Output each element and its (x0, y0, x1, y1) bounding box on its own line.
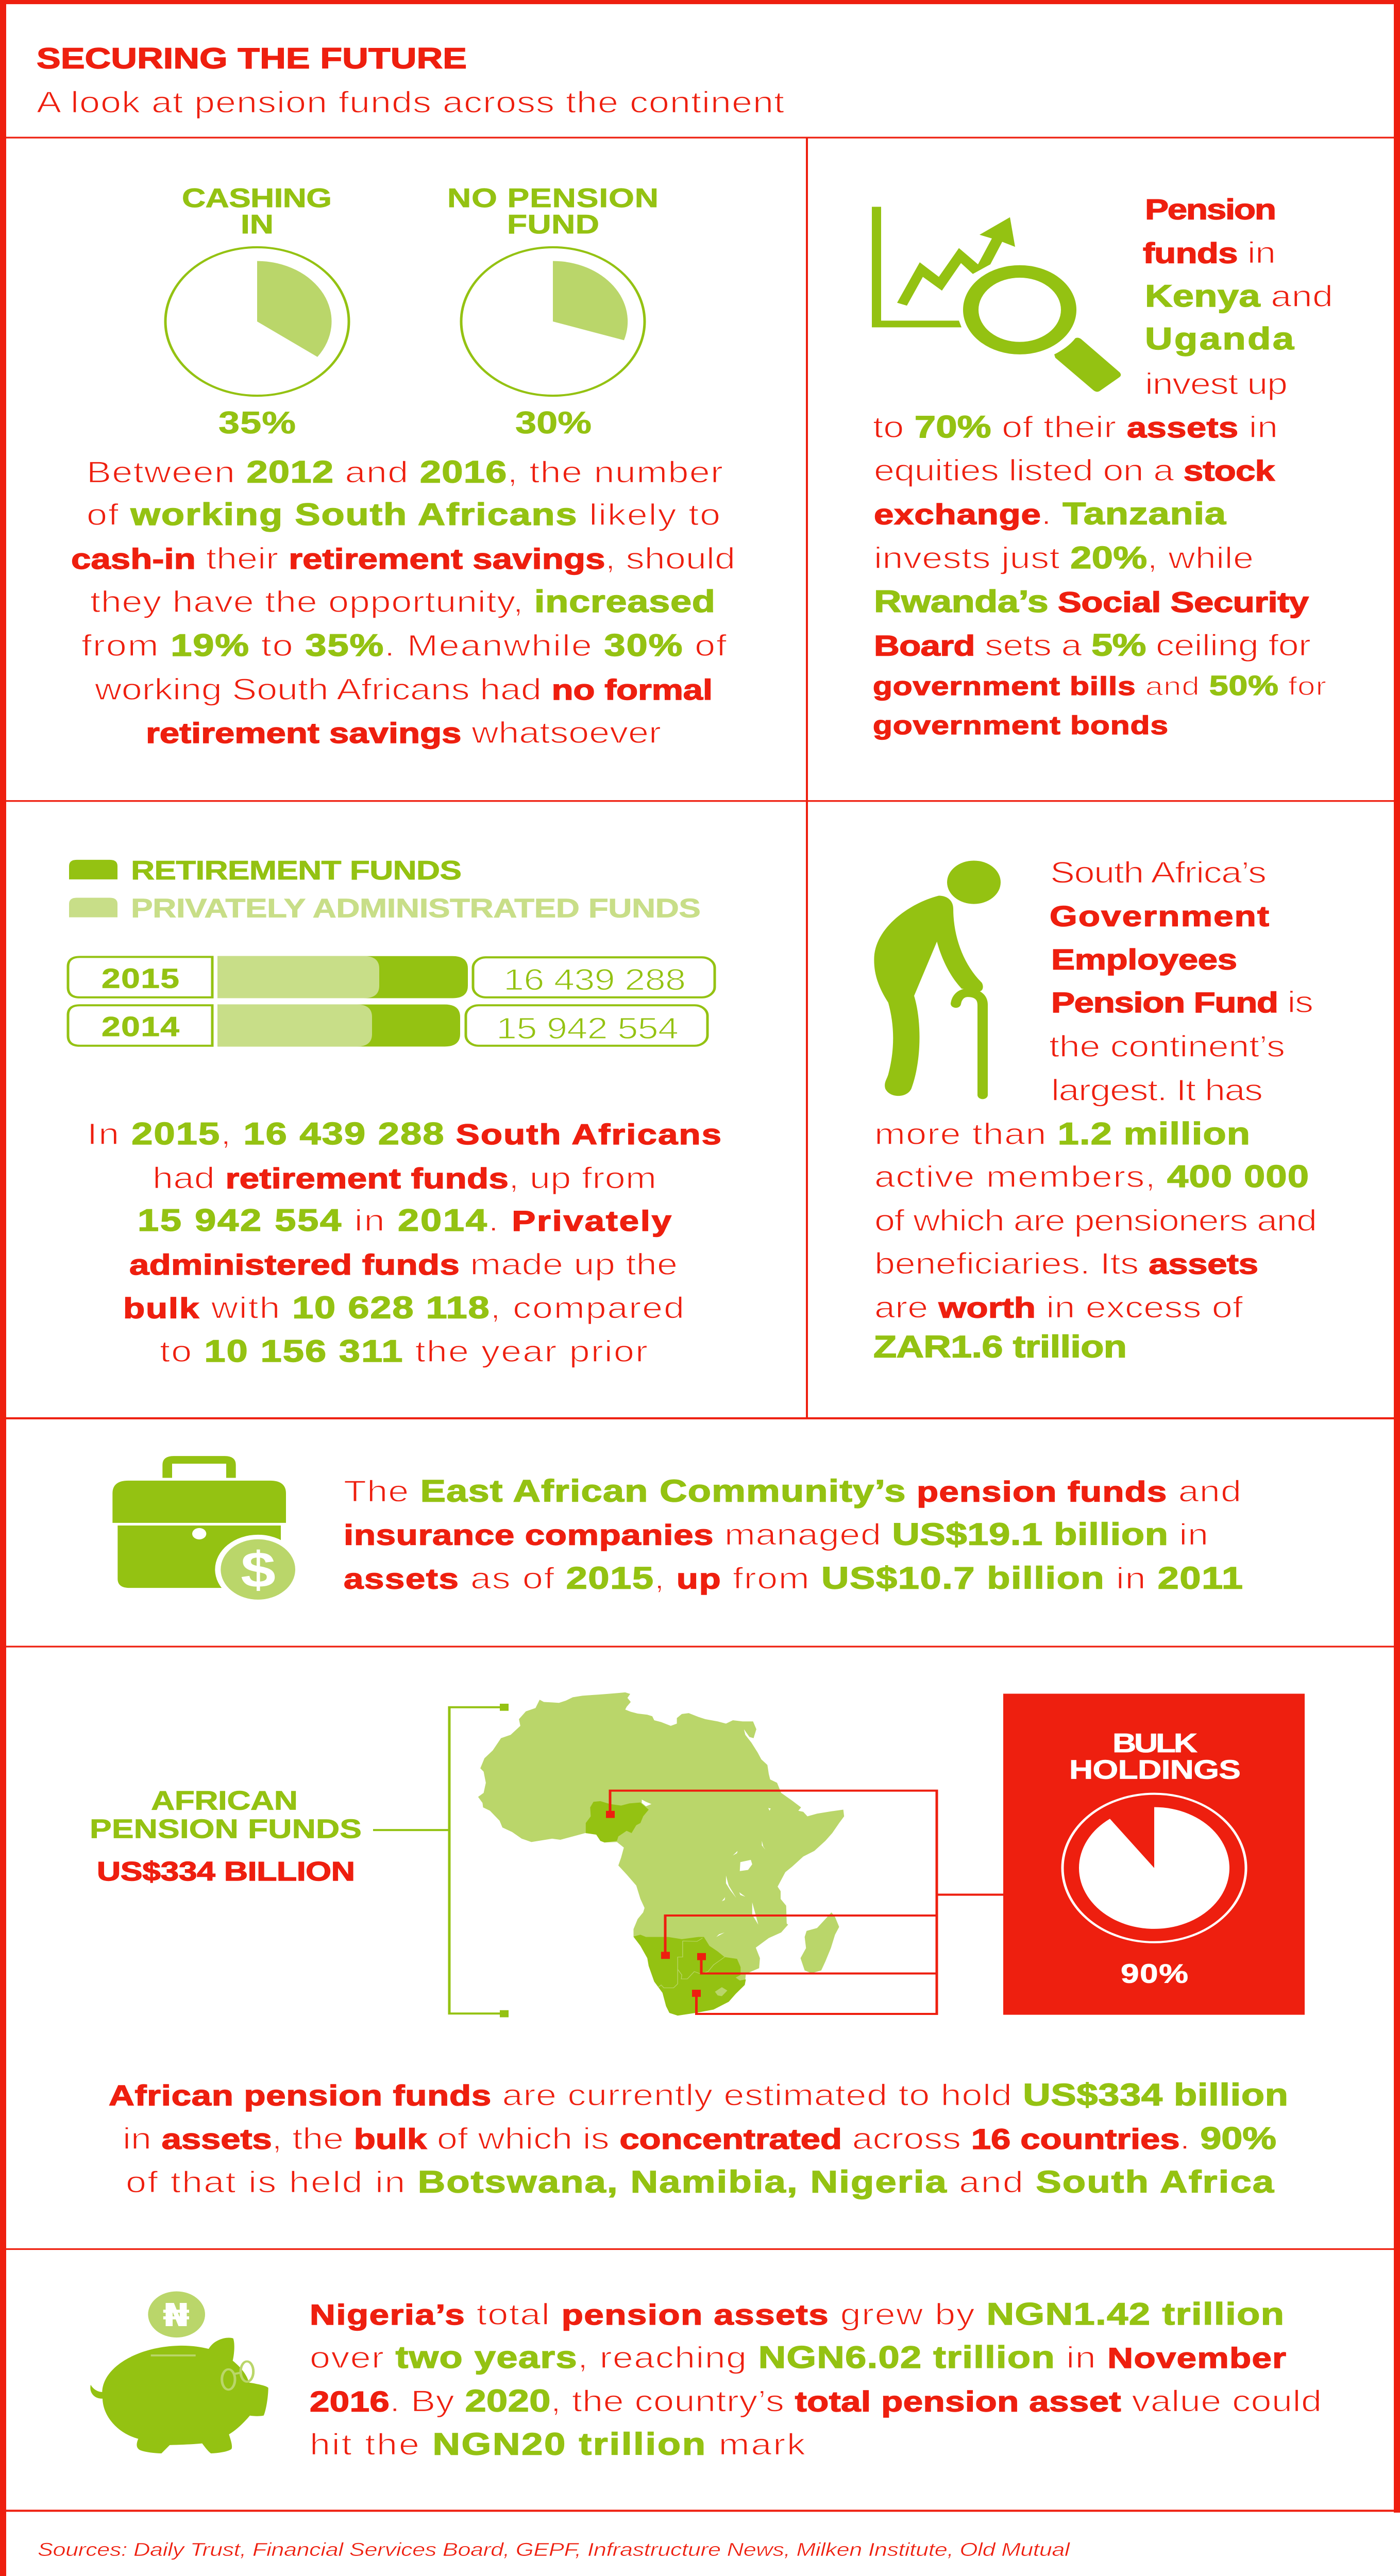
text block: retirement funds figures: bulk with 10 628 118, compared (123, 1291, 684, 1325)
bar: 2015: 2015 (102, 963, 179, 994)
text block: Nigeria: Nigeria’s total pension assets grew by NGN1.42 trillion (310, 2297, 1284, 2331)
pie chart: cashing in 35%: CASHING (182, 183, 332, 213)
text block: GEPF: beneficiaries. Its assets (874, 1247, 1258, 1280)
text block: GEPF: Employees (1051, 944, 1237, 976)
icon: elderly person with cane (874, 860, 1001, 1096)
text block: GEPF (873, 856, 1317, 1364)
legend: RETIREMENT FUNDS (131, 856, 462, 885)
bar: 2014: 2014 (102, 1011, 180, 1042)
text block: GEPF: largest. It has (1051, 1073, 1263, 1107)
text block: Kenya Uganda Tanzania Rwanda: Board sets a 5% ceiling for (874, 628, 1311, 663)
text block: Kenya Uganda Tanzania Rwanda: government bonds (873, 711, 1168, 740)
text block: Kenya Uganda Tanzania Rwanda: equities listed on a stock (874, 454, 1275, 487)
text block: GEPF: of which are pensioners and (874, 1204, 1317, 1238)
text block: Kenya Uganda Tanzania Rwanda (873, 194, 1333, 740)
text block: African pension funds: African pension funds are currently estimated to hold US$334 billion (109, 2078, 1288, 2112)
pie chart: cashing in 35%: IN (241, 210, 274, 240)
icon: chart under magnifying glass (872, 207, 1121, 392)
text block: African pension funds (109, 2078, 1288, 2199)
text block: East African Community (344, 1474, 1243, 1596)
text block: Kenya Uganda Tanzania Rwanda: exchange. Tanzania (874, 497, 1226, 531)
pie chart: cashing in 35% (165, 183, 349, 440)
bar: 2015 (68, 956, 715, 998)
text block: South African retirement savings: retirement savings whatsoever (146, 716, 661, 750)
text block: Kenya Uganda Tanzania Rwanda: to 70% of their assets in (873, 410, 1278, 444)
text block: retirement funds figures: In 2015, 16 439 288 South Africans (87, 1116, 721, 1151)
text block: Nigeria (310, 2297, 1322, 2462)
legend: PRIVATELY ADMINISTRATED FUNDS (131, 893, 701, 923)
icon: briefcase with dollar coin (112, 1456, 301, 1604)
icon: briefcase with dollar coin: $ (241, 1541, 276, 1598)
panel: Government Employees Pension Fund (808, 802, 1394, 1417)
pie chart: no pension fund 30%: 30% (515, 406, 592, 440)
text block: South African retirement savings: of working South Africans likely to (87, 498, 720, 532)
text block: Kenya Uganda Tanzania Rwanda: Rwanda’s Social Security (874, 585, 1309, 619)
panel: retirement funds (6, 802, 806, 1417)
callout: bulk holdings 90%: BULK (1112, 1728, 1197, 1758)
text block: South African retirement savings: working South Africans had no formal (94, 673, 713, 706)
text block: East African Community: insurance companies managed US$19.1 billion in (344, 1517, 1208, 1552)
bar: 2014: 15 942 554 (496, 1012, 679, 1045)
text block: South African retirement savings: Between 2012 and 2016, the number (87, 455, 723, 489)
text block: GEPF: ZAR1.6 trillion (873, 1330, 1127, 1364)
icon: piggy bank with naira coin: ₦ (163, 2297, 190, 2334)
text block: South African retirement savings (71, 455, 735, 750)
text block: GEPF: are worth in excess of (874, 1291, 1243, 1324)
callout: bulk holdings 90% (1003, 1693, 1305, 2015)
legend (69, 856, 701, 923)
text block: South African retirement savings: from 19% to 35%. Meanwhile 30% of (81, 629, 727, 663)
panel: African pension funds (6, 1648, 1394, 2248)
subtitle: A look at pension funds across the continent (37, 86, 784, 119)
text block: African pension funds: of that is held in Botswana, Namibia, Nigeria and South Africa (126, 2165, 1274, 2199)
label: African pension funds US$334 billion: AFRICAN (151, 1786, 298, 1816)
pie chart: cashing in 35%: 35% (218, 406, 296, 440)
text block: retirement funds figures (87, 1116, 721, 1369)
panel: equities investment (808, 139, 1394, 800)
map of Africa (478, 1692, 844, 2015)
text block: Kenya Uganda Tanzania Rwanda: invests just 20%, while (874, 541, 1254, 575)
bracket connector (373, 1704, 509, 2018)
sources: Sources: Daily Trust, Financial Services Board, GEPF, Infrastructure News, Milken Institute, Old Mutual (38, 2539, 1071, 2560)
text block: retirement funds figures: had retirement funds, up from (153, 1161, 656, 1195)
panel: cashing in and no pension fund (6, 139, 806, 800)
label: African pension funds US$334 billion: US$334 BILLION (97, 1857, 355, 1887)
icon: piggy bank with naira coin (90, 2292, 268, 2453)
header (37, 42, 784, 119)
text block: retirement funds figures: to 10 156 311 the year prior (160, 1334, 648, 1369)
pie chart: no pension fund 30%: FUND (507, 210, 599, 240)
text block: Nigeria: 2016. By 2020, the country’s total pension asset value could (310, 2384, 1322, 2418)
label: African pension funds US$334 billion: PENSION FUNDS (90, 1814, 362, 1844)
bar: 2015: 16 439 288 (503, 963, 686, 996)
panel: Nigeria pension assets (6, 2250, 1394, 2510)
text block: GEPF: Pension Fund is (1051, 986, 1313, 1019)
title: SECURING THE FUTURE (37, 42, 467, 75)
text block: Kenya Uganda Tanzania Rwanda: Kenya and (1145, 279, 1333, 313)
text block: East African Community: assets as of 2015, up from US$10.7 billion in 2011 (344, 1561, 1243, 1596)
pie chart: no pension fund 30% (447, 183, 659, 440)
text block: GEPF: the continent’s (1049, 1029, 1285, 1063)
label: African pension funds US$334 billion (90, 1786, 362, 1887)
text block: Kenya Uganda Tanzania Rwanda: funds in (1143, 236, 1276, 269)
text block: GEPF: South Africa’s (1050, 856, 1267, 889)
text block: South African retirement savings: cash-in their retirement savings, should (71, 541, 735, 575)
text block: South African retirement savings: they have the opportunity, increased (90, 585, 715, 619)
text block: retirement funds figures: administered funds made up the (129, 1248, 678, 1281)
text block: retirement funds figures: 15 942 554 in 2014. Privately (138, 1204, 671, 1238)
text block: Nigeria: hit the NGN20 trillion mark (310, 2427, 805, 2462)
text block: Kenya Uganda Tanzania Rwanda: Uganda (1145, 322, 1294, 357)
callout: bulk holdings 90%: 90% (1121, 1959, 1188, 1989)
text block: GEPF: active members, 400 000 (874, 1160, 1309, 1194)
text block: GEPF: more than 1.2 million (874, 1116, 1250, 1151)
panel: East African Community (6, 1419, 1394, 1646)
text block: GEPF: Government (1050, 901, 1269, 933)
text block: Kenya Uganda Tanzania Rwanda: government bills and 50% for (873, 670, 1326, 701)
text block: Kenya Uganda Tanzania Rwanda: invest up (1145, 367, 1288, 400)
text block: African pension funds: in assets, the bulk of which is concentrated across 16 countries. 90% (123, 2122, 1276, 2156)
text block: East African Community: The East African Community’s pension funds and (344, 1474, 1241, 1509)
text block: Nigeria: over two years, reaching NGN6.02 trillion in November (310, 2341, 1286, 2375)
text block: Kenya Uganda Tanzania Rwanda: Pension (1145, 194, 1276, 226)
callout: bulk holdings 90%: HOLDINGS (1069, 1755, 1241, 1785)
bar: 2014 (68, 1005, 707, 1046)
callout lines: holdings connectors (606, 1791, 1003, 2014)
pie chart: no pension fund 30%: NO PENSION (447, 183, 659, 213)
